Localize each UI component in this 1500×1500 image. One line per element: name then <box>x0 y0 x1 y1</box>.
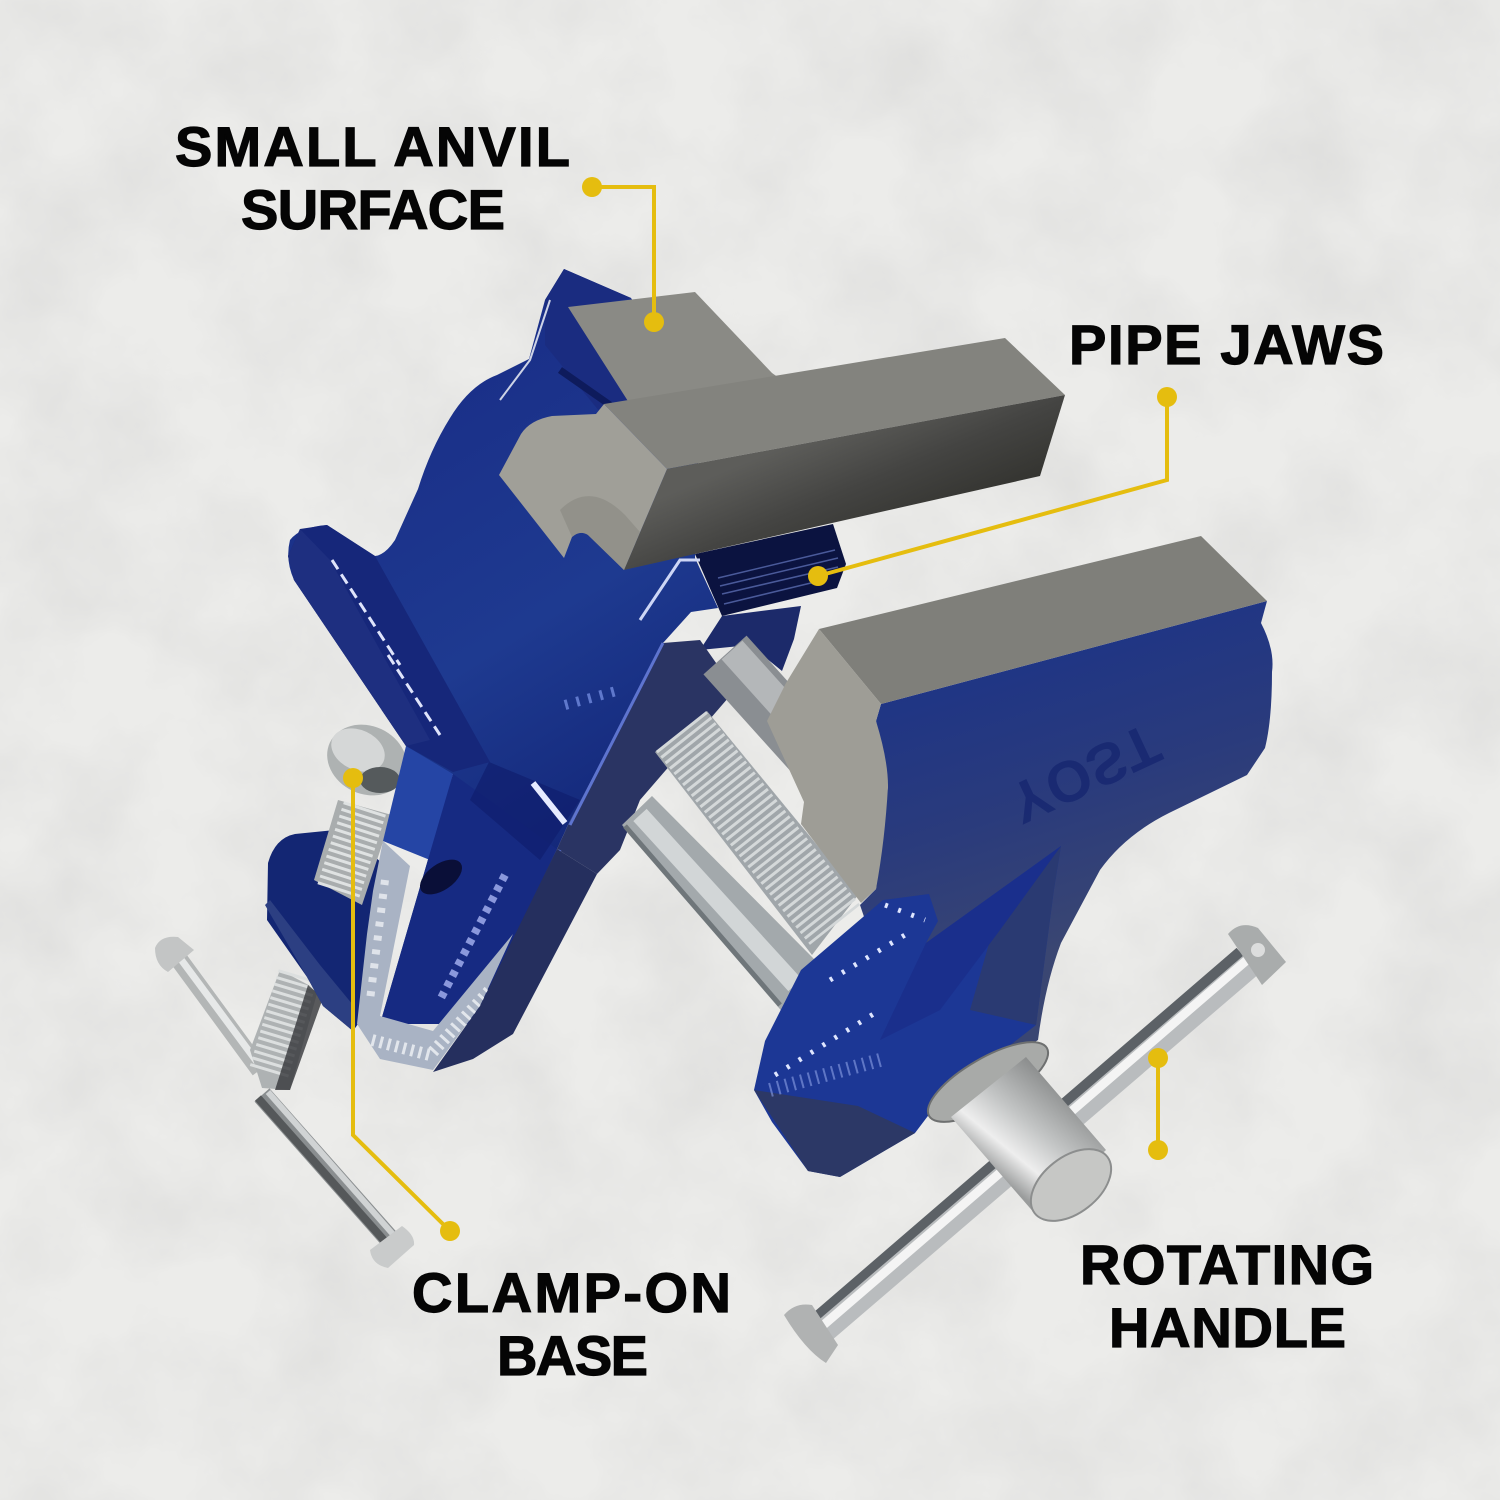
small anvil surface <box>568 292 810 420</box>
label: pipe jaws: PIPE JAWS <box>1069 313 1384 376</box>
front jaw steel profile <box>767 629 888 903</box>
flange ridge <box>288 525 490 772</box>
leader: pipe jaws <box>808 387 1177 586</box>
rear housing behind the rods <box>557 606 801 874</box>
vise illustration <box>155 269 1286 1363</box>
side band above the ribbed casting <box>383 746 453 860</box>
clamp foot pad <box>265 829 400 1031</box>
handle collar washer <box>917 1027 1059 1137</box>
front jaw steel top <box>819 536 1267 704</box>
lower body shading <box>380 560 700 1024</box>
bar top face <box>604 338 1065 469</box>
base outer rim <box>433 849 597 1072</box>
upper clamp screw with bolt head <box>314 712 419 905</box>
label: small anvil surface <box>175 115 570 241</box>
label: rotating handle: ROTATING <box>1080 1233 1374 1296</box>
upper smooth guide rod <box>725 650 822 755</box>
leader: clamp-on base <box>343 768 460 1241</box>
bar end profile <box>499 404 667 570</box>
ear behind the anvil <box>500 269 640 412</box>
lower smooth guide rod <box>622 796 815 1015</box>
bar side face <box>624 395 1065 570</box>
leader: small anvil surface <box>582 177 664 332</box>
label: clamp-on base: BASE <box>497 1324 648 1387</box>
rear steel jaw bar <box>499 338 1065 570</box>
rotating handle bar <box>784 925 1286 1363</box>
label: small anvil surface: SMALL ANVIL <box>175 115 570 178</box>
left clamp handle bar <box>155 937 414 1268</box>
label: small anvil surface: SURFACE <box>241 178 505 241</box>
label: rotating handle <box>1080 1233 1374 1359</box>
front jaw blue casting <box>860 601 1273 1110</box>
label: clamp-on base <box>412 1261 731 1387</box>
front block and gusset <box>754 846 1061 1177</box>
label: clamp-on base: CLAMP-ON <box>412 1261 731 1324</box>
threaded jaw block <box>695 524 846 616</box>
ribbed inner casting of the base <box>357 841 513 1070</box>
embossed brand mark: YOST <box>1000 710 1170 836</box>
threaded main screw <box>655 711 858 955</box>
handle collar cylinder <box>951 1057 1124 1235</box>
label: rotating handle: HANDLE <box>1109 1296 1346 1359</box>
leader: rotating handle <box>1148 1048 1168 1160</box>
main blue vise body <box>288 269 718 1024</box>
lower clamp screw <box>250 970 323 1090</box>
